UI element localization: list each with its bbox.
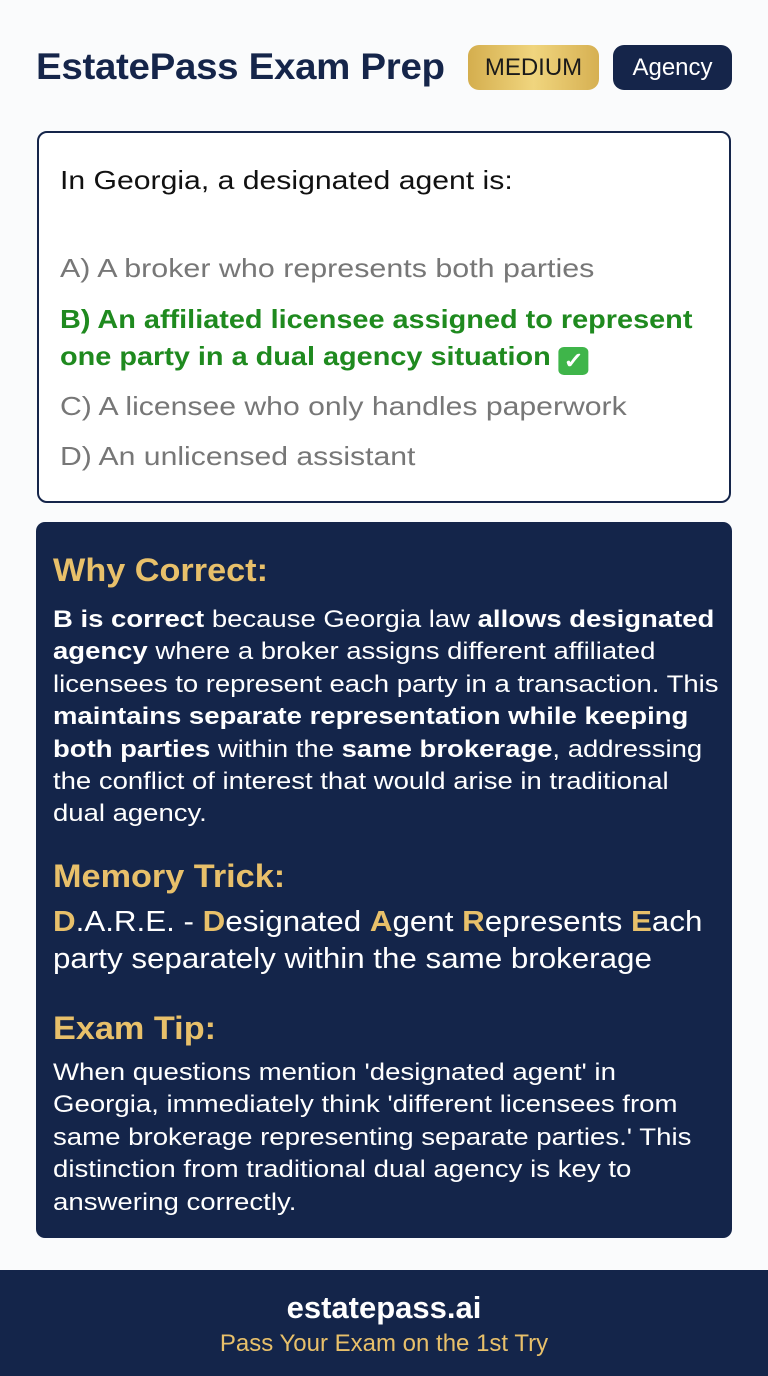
- option B correct: [60, 304, 692, 375]
- badge: agency: Agency: [632, 54, 713, 81]
- option A: A) A broker who represents both parties: [60, 253, 594, 283]
- text: exam tip: Georgia, immediately think 'different licensees from: [53, 1091, 678, 1118]
- text: why correct body: maintains separate representation while keeping: [53, 703, 688, 730]
- option B correct: B) An affiliated licensee assigned to represent: [60, 304, 692, 334]
- title: EstatePass Exam Prep: [36, 46, 445, 87]
- panel: explanation: [36, 522, 732, 1238]
- badge: agency: [613, 45, 732, 90]
- option D: D) An unlicensed assistant: [60, 441, 415, 471]
- text: exam tip: distinction from traditional dual agency is key to: [53, 1156, 631, 1183]
- text: why correct body: the conflict of interest that would arise in traditional: [53, 768, 669, 795]
- text: why correct body: both parties within the same brokerage, addressing: [53, 736, 702, 763]
- text: why correct body: [53, 606, 718, 827]
- badge: medium: [468, 45, 599, 90]
- panel: question: [37, 131, 731, 503]
- text: memory trick: D.A.R.E. - Designated Agent Represents Each: [53, 906, 702, 938]
- text: why correct body: licensees to represent each party in a transaction. This: [53, 671, 718, 698]
- question text: In Georgia, a designated agent is:: [60, 165, 513, 195]
- text: memory trick: party separately within the same brokerage: [53, 943, 652, 975]
- text: exam tip: [53, 1059, 691, 1216]
- text: why correct body: dual agency.: [53, 800, 207, 827]
- heading: memory trick: Memory Trick:: [53, 858, 285, 894]
- heading: exam tip: Exam Tip:: [53, 1010, 216, 1046]
- footer brand: estatepass.ai: [287, 1290, 481, 1325]
- text: why correct body: B is correct because Georgia law allows designated: [53, 606, 714, 633]
- text: exam tip: answering correctly.: [53, 1189, 296, 1216]
- badge: medium: MEDIUM: [485, 54, 582, 81]
- text: memory trick: [53, 906, 702, 975]
- footer tagline: Pass Your Exam on the 1st Try: [220, 1330, 548, 1357]
- text: exam tip: same brokerage representing separate parties.' This: [53, 1124, 691, 1151]
- text: exam tip: When questions mention 'designated agent' in: [53, 1059, 616, 1086]
- option C: C) A licensee who only handles paperwork: [60, 391, 627, 421]
- text: why correct body: agency where a broker assigns different affiliated: [53, 638, 655, 665]
- footer: [0, 1270, 768, 1376]
- option B correct: one party in a dual agency situation: [60, 341, 551, 371]
- heading: why correct: Why Correct:: [53, 552, 268, 588]
- option B correct: ✓: [563, 348, 584, 373]
